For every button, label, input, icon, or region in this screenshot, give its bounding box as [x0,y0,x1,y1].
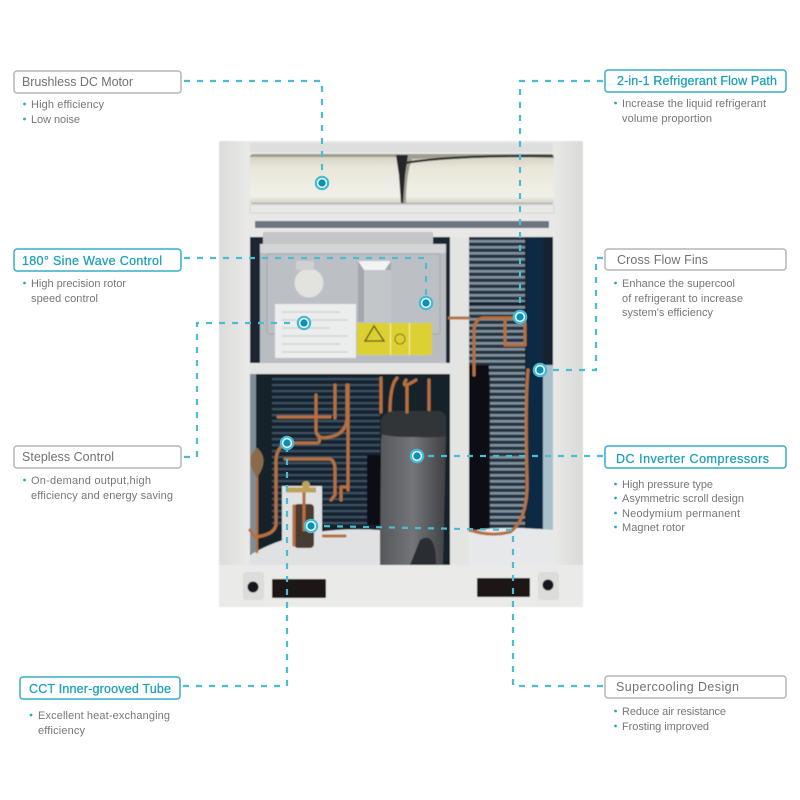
callout: stepless control [14,446,181,502]
air gap strip [255,221,549,228]
leader line: stepless control [184,323,297,457]
heading: cross flow fins [605,249,786,270]
marker: CCT tube [281,437,293,449]
leader line: 2-in-1 refrigerant flow path [520,81,603,310]
list: supercooling benefits [614,706,726,733]
text: sine wave control benefit: High precision rotor [31,278,126,290]
heading: brushless DC motor: Brushless DC Motor [22,75,133,89]
text: stepless control benefit: On-demand output,high [31,475,151,487]
list: supercooling benefits: Frosting improved [622,721,709,733]
marker: cross flow fins [534,364,546,376]
list: motor benefits [23,99,105,126]
leader line: supercooling design [318,526,603,686]
drain slot right [477,578,530,597]
marker: DC inverter compressor [411,450,423,462]
heading: 180 sine wave control: 180° Sine Wave Control [22,254,162,268]
white rating label [275,304,356,358]
centre post [450,237,469,565]
yellow warning label [357,323,432,355]
heading: supercooling design: Supercooling Design [616,680,739,694]
text: flow path benefit [614,98,766,125]
control box mount [263,232,433,244]
unit cabinet frame [219,141,583,607]
electric control box [260,244,446,363]
list: motor benefits: High efficiency [31,99,104,111]
text: flow path benefit: Increase the liquid refrigerant [622,98,766,110]
fan opening [250,154,554,204]
callout: supercooling design [605,676,786,733]
refrigerant distributor block [282,481,322,565]
marker: stepless control [298,317,310,329]
upper-left compartment background [250,237,450,365]
heading: 2-in-1 refrigerant flow path [605,70,786,92]
heading: supercooling design [605,676,786,698]
drain slot left [272,579,326,598]
coil side copper pipes [448,318,528,534]
text: sine wave control benefit [23,278,126,305]
list: compressor features: High pressure type [622,479,713,491]
heading: stepless control: Stepless Control [22,450,114,464]
marker: sine wave control [420,297,432,309]
heading: CCT inner-grooved tube: CCT Inner-grooved Tube [29,682,171,696]
text: CCT tube benefit: efficiency [38,725,86,737]
callout: cross flow fins [605,249,786,319]
text: cross flow fins benefit: system's efficiency [622,307,714,319]
leader line: CCT inner-grooved tube [183,450,287,686]
leader line: 180 sine wave control [184,258,426,296]
lower compartment coil [250,374,450,565]
text: stepless control benefit: efficiency and energy saving [31,490,173,502]
callout: 2-in-1 refrigerant flow path [605,70,786,125]
heading: DC inverter compressors [605,446,786,468]
text: CCT tube benefit: Excellent heat-exchanging [38,710,170,722]
top rail [250,143,553,152]
callout: brushless DC motor [14,71,181,126]
upper-right coil compartment [469,237,553,565]
marker: 2-in-1 flow path [514,311,526,323]
leader line: cross flow fins [547,258,603,370]
text: flow path benefit: volume proportion [622,113,712,125]
heading: cross flow fins: Cross Flow Fins [617,253,708,267]
callout: 180 sine wave control [14,249,181,305]
heading: CCT inner-grooved tube [20,677,180,699]
list: motor benefits: Low noise [31,114,80,126]
marker: brushless DC motor [316,177,328,189]
heading: DC inverter compressors: DC Inverter Compressors [616,452,769,466]
heading: brushless DC motor [14,71,181,93]
right foot hole [538,572,559,600]
list: compressor features: Neodymium permanent [622,508,740,520]
outdoor unit illustration [219,141,583,607]
copper piping [250,378,429,552]
heading: 180 sine wave control [14,249,181,271]
text: cross flow fins benefit: of refrigerant to increase [622,293,743,305]
list: compressor features: Magnet rotor [622,522,685,534]
left foot hole [243,572,264,600]
mid shelf [250,363,469,375]
text: CCT tube benefit [30,710,170,737]
compressor [380,385,446,565]
callout: CCT inner-grooved tube [20,677,180,737]
grille bar [250,205,554,213]
leader line: brushless DC motor [184,81,322,176]
marker: supercooling design [305,520,317,532]
text: sine wave control benefit: speed control [31,293,98,305]
leader line: DC inverter compressors [424,455,603,457]
callout: DC inverter compressors [605,446,786,534]
text: cross flow fins benefit: Enhance the supercool [622,278,735,290]
text: stepless control benefit [23,475,173,502]
heading: 2-in-1 refrigerant flow path: 2-in-1 Refrigerant Flow Path [617,74,777,88]
heading: stepless control [14,446,181,468]
text: cross flow fins benefit [614,278,743,319]
list: supercooling benefits: Reduce air resistance [622,706,726,718]
base plate [219,565,583,607]
list: compressor features: Asymmetric scroll design [622,493,744,505]
list: compressor features [614,479,744,534]
